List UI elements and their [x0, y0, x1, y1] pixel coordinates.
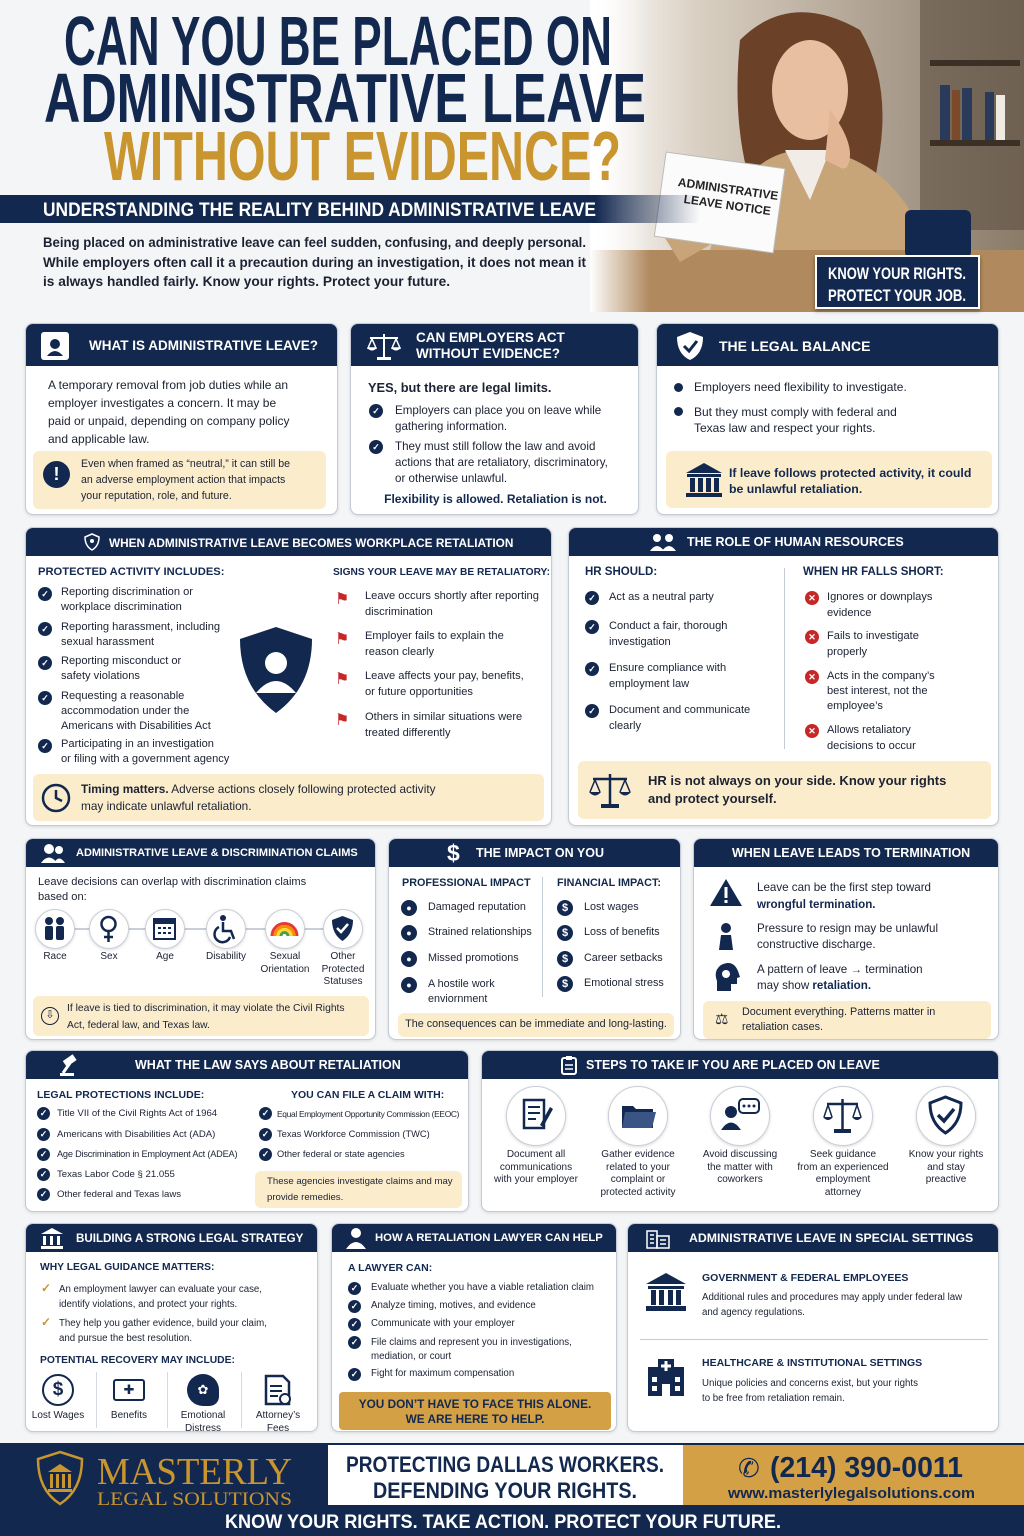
panel: impact on you: THE IMPACT ON YOU [476, 846, 604, 860]
header photo: woman reading notice [590, 0, 1024, 312]
panel: legal strategy: An employment lawyer can evaluate your case, [59, 1284, 262, 1295]
panel: leave leads to termination: Leave can be the first step toward [757, 881, 931, 894]
panel: leave leads to termination: A pattern of leave → termination [757, 963, 923, 976]
icon: hospital [648, 1359, 684, 1396]
panel: impact on you: ● [406, 980, 412, 990]
panel: steps to take: Document all [507, 1149, 565, 1160]
contact box: ✆ [738, 1454, 760, 1484]
callout: HR not on your side: and protect yourself. [648, 791, 777, 806]
panel: workplace retaliation: ⚑ [335, 712, 349, 729]
panel: leave leads to termination [693, 838, 999, 1040]
panel: discrimination claims: Leave decisions can overlap with discrimination claims [38, 876, 306, 888]
mug [905, 210, 971, 258]
panel: impact on you: Loss of benefits [584, 926, 660, 938]
panel: workplace retaliation: Reporting misconduct or [61, 655, 181, 667]
panel: special settings: to be free from retaliation remain. [702, 1393, 845, 1404]
panel: what is administrative leave: paid or unpaid, depending on company policy [48, 414, 290, 428]
panel: role of HR: Ensure compliance with [609, 662, 726, 674]
icon: government building [646, 1273, 686, 1311]
panel: can employers act without evidence: YES, but there are legal limits. [368, 380, 551, 395]
callout: agencies: These agencies investigate claims and may [267, 1176, 453, 1187]
panel: special settings: ADMINISTRATIVE LEAVE IN SPECIAL SETTINGS [689, 1231, 973, 1245]
panel: workplace retaliation: Participating in an investigation [61, 738, 214, 750]
panel: impact on you: FINANCIAL IMPACT: [557, 877, 661, 889]
icon: courthouse [41, 1228, 63, 1249]
tagline box: DEFENDING YOUR RIGHTS. [373, 1478, 637, 1503]
panel: can employers act without evidence: actions that are retaliatory, discriminatory, [395, 456, 608, 469]
panel: role of HR: best interest, not the [827, 685, 928, 697]
panel: what the law says: Other federal or state agencies [277, 1149, 405, 1159]
panel: impact on you: enviornment [428, 993, 487, 1005]
panel: the legal balance: But they must comply with federal and [694, 405, 897, 419]
panel: what the law says: Age Discrimination in Employment Act (ADEA) [57, 1149, 237, 1159]
face [772, 40, 848, 140]
panel: what is administrative leave: and applicable law. [48, 432, 149, 446]
panel: role of HR: THE ROLE OF HUMAN RESOURCES [687, 535, 904, 549]
panel: can employers act without evidence: or otherwise unlawful. [395, 472, 507, 485]
intro text [43, 234, 586, 289]
panel: can employers act without evidence [350, 323, 639, 515]
panel: workplace retaliation: ✓ [41, 589, 49, 599]
panel: what is administrative leave: WHAT IS ADMINISTRATIVE LEAVE? [89, 338, 318, 353]
panel: what the law says: ✓ [262, 1108, 269, 1118]
icon: building [646, 1230, 670, 1249]
panel: impact on you: Damaged reputation [428, 901, 526, 913]
panel: what the law says: ✓ [262, 1129, 269, 1139]
icons: protected classes: Race [43, 951, 67, 962]
callout: adverse action: your reputation, role, and future. [81, 490, 232, 502]
panel: role of HR: employment law [609, 678, 689, 690]
recovery icons: $ [53, 1379, 63, 1400]
recovery icons: ✚ [124, 1382, 134, 1397]
panel: role of HR: Allows retaliatory [827, 724, 911, 736]
recovery icons: Benefits [111, 1410, 147, 1421]
panel: how a lawyer can help: Analyze timing, motives, and evidence [371, 1300, 536, 1311]
panel: what the law says: ✓ [40, 1149, 47, 1159]
panel: workplace retaliation: Employer fails to explain the [365, 630, 504, 642]
panel: role of HR: evidence [827, 606, 871, 618]
panel: can employers act without evidence: They must still follow the law and avoid [395, 440, 595, 453]
icons: protected classes: Disability [206, 951, 246, 962]
panel: how a lawyer can help: A LAWYER CAN: [348, 1262, 432, 1274]
panel: legal strategy: identify violations, and protect your rights. [59, 1299, 237, 1310]
callout: timing matters: may indicate unlawful retaliation. [81, 799, 252, 813]
panel: what is administrative leave [25, 323, 338, 515]
icons: protected classes: Age [156, 951, 174, 962]
panel: what the law says: LEGAL PROTECTIONS INCLUDE: [37, 1089, 204, 1101]
icons: protected classes: Statuses [324, 976, 362, 987]
panel: role of HR [568, 527, 999, 826]
panel: role of HR: investigation [609, 636, 671, 648]
panel: role of HR: ✓ [588, 664, 596, 674]
icons: protected classes: Orientation [261, 964, 309, 974]
panel: role of HR: ✕ [808, 672, 816, 682]
panel: special settings: HEALTHCARE & INSTITUTIONAL SETTINGS [702, 1357, 922, 1369]
panel: what the law says: Texas Labor Code § 21.055 [57, 1169, 175, 1180]
panel: discrimination claims [25, 838, 376, 1040]
callout: consequences: The consequences can be immediate and long-lasting. [405, 1018, 667, 1030]
icon: warning [710, 879, 742, 906]
panel: the legal balance [656, 323, 999, 515]
icon: group [41, 844, 65, 863]
panel: how a lawyer can help: HOW A RETALIATION LAWYER CAN HELP [375, 1232, 603, 1244]
panel: special settings: GOVERNMENT & FEDERAL EMPLOYEES [702, 1272, 908, 1284]
callout: timing matters [33, 774, 544, 821]
panel: steps to take: Seek guidance [810, 1149, 876, 1160]
panel: what is administrative leave: A temporary removal from job duties while an [48, 378, 288, 392]
header photo: woman reading notice: LEAVE NOTICE [683, 192, 772, 218]
callout: civil rights: ⇩ [45, 1009, 55, 1021]
panel: workplace retaliation: Others in similar situations were [365, 711, 522, 723]
panel: impact on you: Strained relationships [428, 926, 532, 938]
contact box: www.masterlylegalsolutions.com [727, 1485, 975, 1502]
callout: HR not on your side: HR is not always on your side. Know your rights [648, 773, 946, 788]
panel: can employers act without evidence: WITHOUT EVIDENCE? [416, 346, 560, 361]
panel: special settings: Unique policies and concerns exist, but your rights [702, 1378, 918, 1389]
panel: impact on you: PROFESSIONAL IMPACT [402, 877, 531, 889]
icons: protected classes: Protected [322, 964, 364, 974]
panel: role of HR: ✓ [588, 622, 596, 632]
intro text: is always handled fairly. Know your rights. Protect your future. [43, 273, 450, 289]
panel: what the law says: ✓ [262, 1149, 269, 1159]
callout: document everything [703, 1001, 991, 1039]
logo: MASTERLY [97, 1451, 292, 1493]
panel: how a lawyer can help: ✓ [351, 1301, 358, 1311]
panel: workplace retaliation: ⚑ [335, 631, 349, 648]
contact box: (214) 390-0011 [770, 1452, 963, 1484]
panel: steps to take: related to your [606, 1162, 670, 1172]
icons: protected classes: Other [330, 951, 356, 962]
panel: workplace retaliation: Leave affects your pay, benefits, [365, 670, 524, 682]
panel: legal strategy: POTENTIAL RECOVERY MAY INCLUDE: [40, 1355, 235, 1366]
icon: people [650, 534, 676, 551]
panel: what the law says: Other federal and Texas laws [57, 1189, 181, 1200]
callout: adverse action [33, 451, 326, 509]
body [710, 150, 930, 250]
panel: workplace retaliation: workplace discrimination [61, 601, 182, 613]
panel: impact on you: $ [447, 840, 460, 866]
panel: role of HR: properly [827, 646, 867, 658]
callout: protected activity: If leave follows protected activity, it could [729, 466, 971, 480]
panel: role of HR: ✕ [808, 593, 816, 603]
panel: role of HR: employee’s [827, 700, 883, 712]
panel: discrimination claims: ADMINISTRATIVE LEAVE & DISCRIMINATION CLAIMS [76, 847, 358, 859]
panel: workplace retaliation: ✓ [41, 741, 49, 751]
icon: shield check [677, 332, 703, 360]
panel: discrimination claims: based on: [38, 891, 87, 903]
callout: know your rights box [815, 255, 980, 309]
step icons [506, 1086, 566, 1146]
panel: what the law says: WHAT THE LAW SAYS ABOUT RETALIATION [135, 1058, 401, 1072]
panel: steps to take: coworkers [717, 1174, 763, 1185]
panel: steps to take: the matter with [707, 1162, 773, 1172]
panel: workplace retaliation: Americans with Disabilities Act [61, 720, 211, 732]
panel: how a lawyer can help: ✓ [351, 1283, 358, 1293]
panel: what the law says: ✓ [40, 1129, 47, 1139]
panel: what is administrative leave: employer investigates a concern. It may be [48, 396, 276, 410]
panel: role of HR: ✓ [588, 593, 596, 603]
panel: workplace retaliation: ✓ [41, 658, 49, 668]
panel: how a lawyer can help: ✓ [351, 1337, 358, 1347]
panel: special settings: Additional rules and procedures may apply under federal law [702, 1292, 962, 1303]
callout: adverse action: Even when framed as “neutral,” it can still be [81, 458, 290, 470]
paper [654, 152, 785, 253]
panel: legal strategy: WHY LEGAL GUIDANCE MATTERS: [40, 1262, 214, 1273]
panel: workplace retaliation: ⚑ [335, 591, 349, 608]
contact box [683, 1445, 1024, 1505]
panel: impact on you: Career setbacks [584, 952, 663, 964]
panel: how a lawyer can help [331, 1223, 617, 1432]
subtitle banner [0, 195, 700, 223]
panel: steps to take: and stay [927, 1162, 965, 1172]
panel: role of HR: Fails to investigate [827, 630, 919, 642]
panel: role of HR: ✕ [808, 726, 816, 736]
footer [0, 1443, 1024, 1536]
tagline box [328, 1445, 683, 1505]
panel: legal strategy: and pursue the best resolution. [59, 1333, 192, 1344]
panel: impact on you: $ [562, 902, 568, 914]
panel: impact on you: ● [406, 954, 412, 964]
panel: role of HR: Acts in the company’s [827, 670, 935, 682]
icon: badge [41, 332, 69, 360]
panel: what the law says: ✓ [40, 1189, 47, 1199]
callout: document everything: retaliation cases. [742, 1021, 823, 1033]
panel: workplace retaliation: ⚑ [335, 671, 349, 688]
panel: how a lawyer can help: File claims and represent you in investigations, [371, 1337, 572, 1348]
icons: protected classes: Sexual [270, 951, 300, 962]
panel: workplace retaliation [25, 527, 552, 826]
header photo: woman reading notice: ADMINISTRATIVE [677, 175, 779, 203]
icon: person [719, 923, 733, 950]
panel: can employers act without evidence: gathering information. [395, 420, 507, 432]
icon: gavel [60, 1054, 77, 1076]
panel: workplace retaliation: Reporting discrimination or [61, 586, 193, 598]
panel: impact on you: A hostile work [428, 978, 495, 990]
panel: the legal balance: Employers need flexibility to investigate. [694, 380, 907, 394]
panel: workplace retaliation: safety violations [61, 670, 140, 682]
panel: workplace retaliation: PROTECTED ACTIVITY INCLUDES: [38, 566, 224, 578]
panel: legal strategy [25, 1223, 318, 1432]
icons: protected classes: Sex [100, 951, 118, 962]
callout: agencies [255, 1171, 462, 1208]
panel: steps to take: STEPS TO TAKE IF YOU ARE PLACED ON LEAVE [586, 1058, 880, 1072]
callout: civil rights [33, 996, 369, 1036]
callout: protected activity [666, 451, 992, 508]
panel: workplace retaliation: or future opportunities [365, 686, 473, 698]
callout: HR not on your side [578, 761, 991, 819]
hair [738, 12, 882, 210]
hand holding paper [660, 227, 710, 262]
panel: workplace retaliation: discrimination [365, 606, 433, 618]
panel: workplace retaliation: Reporting harassment, including [61, 621, 220, 633]
panel: workplace retaliation: ✓ [41, 624, 49, 634]
panel: role of HR: ✕ [808, 632, 816, 642]
panel: role of HR: HR SHOULD: [585, 566, 657, 578]
callout: civil rights: If leave is tied to discrimination, it may violate the Civil Rights [67, 1003, 345, 1014]
panel: impact on you [388, 838, 681, 1040]
panel: can employers act without evidence: Flexibility is allowed. Retaliation is not. [384, 492, 607, 506]
desk [590, 250, 1024, 312]
callout: adverse action: ! [54, 464, 60, 484]
panel: steps to take: attorney [825, 1186, 861, 1198]
panel: steps to take: protected activity [600, 1186, 676, 1198]
panel: the legal balance: THE LEGAL BALANCE [719, 338, 870, 354]
recovery icons: Lost Wages [32, 1410, 84, 1421]
panel: role of HR: ✓ [588, 706, 596, 716]
panel: can employers act without evidence: ✓ [372, 442, 380, 452]
panel: how a lawyer can help: Communicate with your employer [371, 1318, 515, 1329]
panel: impact on you: Lost wages [584, 901, 639, 913]
panel: impact on you: ● [406, 903, 412, 913]
recovery icons: ✿ [198, 1382, 208, 1397]
callout button: not alone [339, 1392, 611, 1430]
panel: role of HR: clearly [609, 720, 641, 732]
subtitle banner: UNDERSTANDING THE REALITY BEHIND ADMINISTRATIVE LEAVE [43, 200, 596, 221]
panel: how a lawyer can help: Evaluate whether you have a viable retaliation claim [371, 1282, 594, 1293]
icon: large shield person [240, 627, 312, 713]
panel: impact on you: Missed promotions [428, 952, 519, 964]
panel: impact on you: $ [562, 978, 568, 990]
panel: steps to take: from an experienced [797, 1162, 889, 1172]
panel: workplace retaliation: sexual harassment [61, 636, 154, 648]
panel: can employers act without evidence: ✓ [372, 406, 380, 416]
bottom slogan: KNOW YOUR RIGHTS. TAKE ACTION. PROTECT YOUR FUTURE. [225, 1512, 781, 1533]
panel: what the law says: Americans with Disabilities Act (ADA) [57, 1129, 215, 1140]
icons: protected classes [34, 909, 364, 987]
panel: steps to take: communications [500, 1162, 572, 1172]
panel: steps to take: preactive [926, 1174, 966, 1185]
logo [36, 1450, 292, 1508]
panel: workplace retaliation: treated differently [365, 726, 451, 738]
panel: workplace retaliation: reason clearly [365, 646, 434, 658]
panel: role of HR: WHEN HR FALLS SHORT: [803, 566, 944, 578]
panel: role of HR: Act as a neutral party [609, 591, 714, 603]
callout: adverse action: an adverse employment action that impacts [81, 474, 285, 486]
callout: consequences [398, 1013, 674, 1037]
panel: how a lawyer can help: ✓ [351, 1319, 358, 1329]
panel: what the law says: ✓ [40, 1108, 47, 1118]
panel: steps to take [481, 1050, 999, 1212]
panel: workplace retaliation: Requesting a reasonable [61, 690, 184, 702]
icon: scale [366, 334, 402, 360]
panel: leave leads to termination: Pressure to resign may be unlawful [757, 922, 938, 935]
panel: legal strategy: BUILDING A STRONG LEGAL STRATEGY [76, 1232, 303, 1245]
panel: workplace retaliation: or filing with a government agency [61, 753, 229, 765]
recovery icons: Emotional [181, 1410, 225, 1421]
icon: person [346, 1228, 366, 1249]
panel: special settings [627, 1223, 999, 1432]
panel: role of HR: Ignores or downplays [827, 591, 932, 603]
panel: workplace retaliation: accommodation under the [61, 705, 189, 717]
icon: small shield [84, 533, 100, 551]
panel: how a lawyer can help: Fight for maximum compensation [371, 1368, 514, 1379]
callout: timing matters: Timing matters. Adverse actions closely following protected activity [81, 782, 436, 796]
panel: impact on you: Emotional stress [584, 977, 664, 989]
panel: steps to take: employment [816, 1174, 870, 1185]
panel: steps to take: Know your rights [909, 1149, 983, 1160]
panel: legal strategy: They help you gather evidence, build your claim, [59, 1318, 267, 1329]
panel: what the law says: Texas Workforce Commission (TWC) [277, 1129, 430, 1139]
panel: leave leads to termination: may show retaliation. [757, 979, 871, 992]
callout: agencies: provide remedies. [267, 1192, 343, 1203]
panel: what the law says [25, 1050, 469, 1212]
panel: leave leads to termination: wrongful termination. [757, 898, 876, 911]
panel: can employers act without evidence: CAN EMPLOYERS ACT [416, 330, 565, 345]
callout button: not alone: WE ARE HERE TO HELP. [406, 1412, 544, 1426]
panel: how a lawyer can help: mediation, or court [371, 1351, 451, 1362]
panel: the legal balance: Texas law and respect your rights. [694, 421, 875, 435]
panel: what the law says: YOU CAN FILE A CLAIM WITH: [291, 1089, 444, 1101]
panel: legal strategy: ✓ [41, 1281, 51, 1295]
panel: role of HR: Document and communicate [609, 704, 750, 716]
panel: impact on you: ● [406, 928, 412, 938]
icon: clipboard [561, 1056, 577, 1075]
panel: how a lawyer can help: ✓ [351, 1369, 358, 1379]
panel: role of HR: Conduct a fair, thorough [609, 620, 727, 632]
callout: civil rights: Act, federal law, and Texas law. [67, 1020, 210, 1031]
callout button: not alone: YOU DON’T HAVE TO FACE THIS ALONE. [359, 1397, 591, 1411]
title [44, 2, 646, 190]
panel: workplace retaliation: WHEN ADMINISTRATIVE LEAVE BECOMES WORKPLACE RETALIATION [109, 536, 513, 550]
panel: steps to take: Gather evidence [601, 1149, 675, 1160]
panel: role of HR: decisions to occur [827, 740, 916, 752]
icon: head [716, 963, 740, 991]
panel: leave leads to termination: constructive discharge. [757, 938, 876, 951]
panel: what the law says: ✓ [40, 1169, 47, 1179]
panel: workplace retaliation: Leave occurs shortly after reporting [365, 590, 539, 602]
panel: what the law says: Title VII of the Civil Rights Act of 1964 [57, 1108, 217, 1119]
panel: workplace retaliation: ✓ [41, 693, 49, 703]
panel: legal strategy: ✓ [41, 1315, 51, 1329]
panel: workplace retaliation: SIGNS YOUR LEAVE MAY BE RETALIATORY: [333, 567, 550, 578]
panel: steps to take: with your employer [494, 1174, 578, 1185]
callout: protected activity: be unlawful retaliation. [729, 482, 862, 496]
panel: steps to take: complaint or [611, 1174, 665, 1185]
callout: document everything: ⚖ [715, 1011, 728, 1028]
callout: document everything: Document everything. Patterns matter in [742, 1006, 935, 1018]
panel: can employers act without evidence: Employers can place you on leave while [395, 404, 601, 417]
panel: what the law says: Equal Employment Opportunity Commission (EEOC) [277, 1109, 459, 1119]
panel: leave leads to termination: WHEN LEAVE LEADS TO TERMINATION [732, 846, 970, 860]
recovery icons: Attorney’s [256, 1410, 300, 1421]
intro text: While employers often call it a precaution during an investigation, it does not mean it [43, 254, 586, 270]
recovery icons [32, 1372, 300, 1432]
panel: special settings: and agency regulations. [702, 1307, 805, 1318]
panel: impact on you: $ [562, 953, 568, 965]
panel: steps to take: Avoid discussing [703, 1149, 777, 1160]
panel: impact on you: $ [562, 927, 568, 939]
